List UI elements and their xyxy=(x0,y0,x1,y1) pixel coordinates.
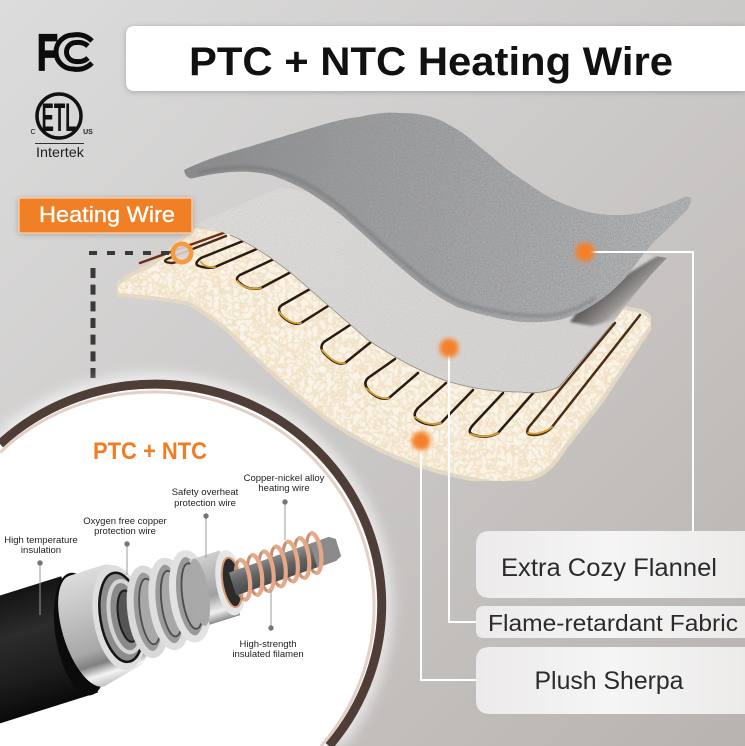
copper-nickel coil back half xyxy=(234,532,316,602)
dashed leader to inset xyxy=(89,253,170,378)
shadow beneath flannel xyxy=(570,250,670,326)
icon: ETL Intertek mark: C xyxy=(30,129,36,136)
cable cross-section xyxy=(0,531,342,724)
copper-nickel coil front half xyxy=(232,532,329,600)
callout: heating wire label: Heating Wire xyxy=(39,202,175,227)
icon: FCC logo: F xyxy=(37,24,58,81)
annotation: high temperature insulation: insulation xyxy=(21,545,61,556)
heating wire loops xyxy=(140,232,640,437)
icon: ETL Intertek mark xyxy=(30,94,93,160)
leader line: flannel xyxy=(585,252,693,531)
icon: heating wire marker xyxy=(173,244,191,262)
label: Extra Cozy Flannel: Extra Cozy Flannel xyxy=(501,554,717,582)
marker: fabric xyxy=(440,338,458,358)
title banner: PTC + NTC Heating Wire xyxy=(189,40,673,84)
icon: ETL Intertek mark: ETL xyxy=(42,96,76,140)
panel: cable inset lens xyxy=(0,373,393,746)
copper protection rings xyxy=(126,550,210,658)
icon: FCC logo xyxy=(37,24,92,81)
inset heading: PTC + NTC xyxy=(93,438,207,465)
layer: plush sherpa xyxy=(117,228,651,481)
label: Extra Cozy Flannel xyxy=(476,531,745,598)
callout: heating wire label xyxy=(19,198,192,233)
outer jacket xyxy=(0,572,101,724)
safety wire sleeve xyxy=(189,550,245,626)
marker: sherpa xyxy=(412,432,430,450)
label: Plush Sherpa xyxy=(476,647,745,714)
annotation: oxygen free copper protection wire: protection wire xyxy=(94,526,156,537)
icon: ETL Intertek mark: LISTED xyxy=(52,135,66,140)
annotation: safety overheat protection wire: protection wire xyxy=(174,498,236,509)
label: Plush Sherpa: Plush Sherpa xyxy=(534,667,684,695)
annotation: copper-nickel alloy heating wire: Copper-nickel alloy xyxy=(244,473,325,484)
icon: ETL Intertek mark: US xyxy=(83,129,93,136)
annotation: high-strength insulated filamen: insulated filamen xyxy=(232,649,304,660)
label: Flame-retardant Fabric: Flame-retardant Fabric xyxy=(488,610,738,636)
annotation: safety overheat protection wire: Safety overheat xyxy=(172,487,239,498)
leader line: fabric xyxy=(449,348,476,622)
annotation: high temperature insulation: High temperature xyxy=(4,535,78,546)
leader line: sherpa xyxy=(421,441,476,680)
annotation: oxygen free copper protection wire: Oxygen free copper xyxy=(83,516,167,527)
pointers xyxy=(37,499,288,631)
title banner xyxy=(126,26,745,91)
annotation: high-strength insulated filamen: High-strength xyxy=(239,639,297,650)
insulated filament core xyxy=(228,535,343,595)
aluminium shield cylinder xyxy=(58,564,146,687)
annotation: copper-nickel alloy heating wire: heating wire xyxy=(258,483,310,494)
marker: flannel xyxy=(576,242,594,262)
layer: extra cozy flannel xyxy=(184,113,691,322)
icon: ETL Intertek mark: Intertek xyxy=(36,144,85,160)
layer: flame-retardant fabric xyxy=(194,187,667,393)
